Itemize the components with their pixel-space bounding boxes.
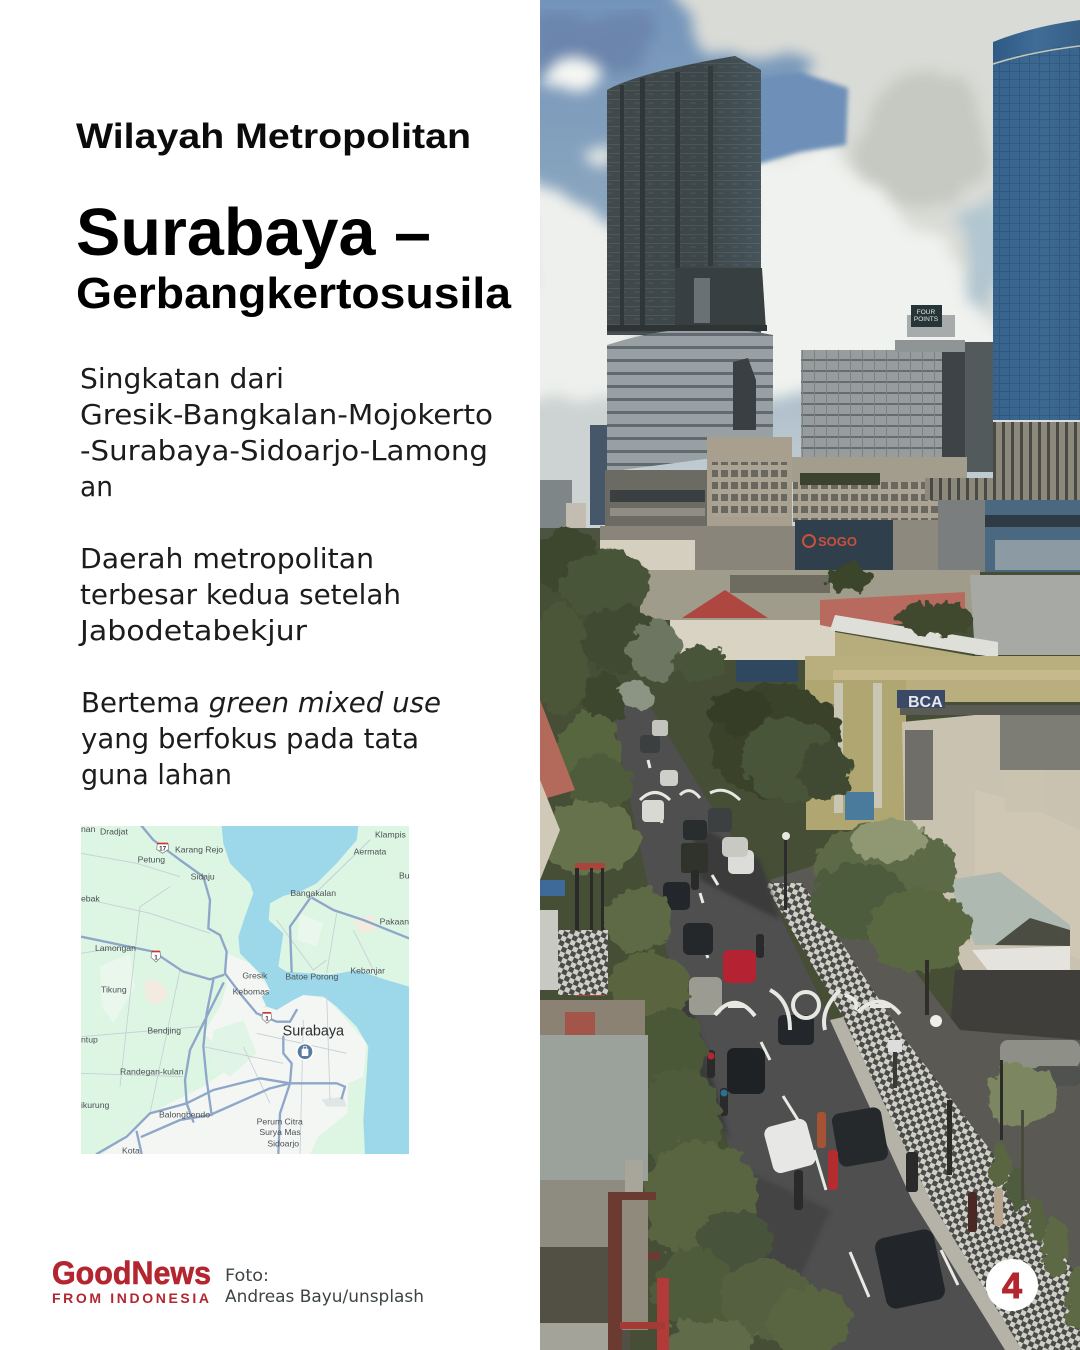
photo: BCA building: [897, 690, 1080, 1045]
text block: green mixed use: Bertema green mixed use: [81, 686, 441, 719]
map: place labels: Bendjing: [147, 1026, 181, 1036]
photo: shopping mall podium: [600, 437, 1080, 572]
photo: tower drum podium: [607, 325, 773, 472]
map: urban land: [100, 913, 377, 1154]
photo: shopping mall podium: SOGO: [818, 534, 857, 549]
map: place labels: ikurung: [81, 1100, 110, 1110]
heading: region label: Wilayah Metropolitan: [76, 117, 471, 156]
map: place labels: Surya Mas: [259, 1127, 301, 1137]
photo: left building: [540, 1000, 648, 1350]
photo: BCA building: BCA: [908, 694, 943, 711]
photo: pavement curb: [830, 1017, 1022, 1350]
photo: hotel block: POINTS: [914, 316, 939, 323]
map: place labels: [81, 824, 410, 1155]
map: place labels: Randegan-kulan: [120, 1067, 184, 1077]
map: place labels: Bangakalan: [290, 888, 336, 898]
map: highway shields: 1: [265, 1016, 269, 1023]
photo: left sidewalk and shops: [540, 700, 608, 995]
map: highway shields: 1: [154, 954, 158, 961]
logo: GoodNews from Indonesia: GoodNews: [52, 1255, 211, 1291]
text block: second largest metropolitan: [78, 542, 401, 647]
map: place labels: Gresik: [242, 971, 268, 981]
photo: road: [609, 690, 1022, 1350]
text block: green mixed use: yang berfokus pada tata: [81, 722, 419, 755]
map of Surabaya region: [81, 824, 410, 1155]
map: place labels: ntup: [81, 1035, 98, 1045]
map: place labels: Aermata: [354, 847, 387, 857]
map: place labels: Kebomas: [233, 986, 270, 996]
text block: second largest metropolitan: Daerah metropolitan: [80, 542, 374, 575]
photo: olive building: [805, 615, 1080, 830]
title: Gerbangkertosusila: Gerbangkertosusila: [76, 269, 512, 318]
photo: red steel frames: [575, 863, 669, 1350]
map: place labels: Tikung: [101, 985, 127, 995]
map: highway shields: 17: [159, 846, 167, 853]
map: place labels: Lamongan: [95, 943, 136, 953]
map: main roads: [81, 826, 409, 1154]
photo: street ornaments: [640, 790, 900, 1030]
map: place labels: nan: [81, 824, 96, 834]
map: place labels: Sidoarjo: [267, 1139, 299, 1149]
text block: abbreviation: Singkatan dari: [80, 362, 284, 395]
photo: ground base beneath trees: [540, 540, 1080, 1350]
map: place labels: Batoe Porong: [285, 972, 338, 982]
photo: rooftops: [600, 540, 1080, 682]
map: place labels: Klampis: [375, 830, 406, 840]
map: place labels: ebak: [81, 894, 100, 904]
text block: abbreviation: [80, 362, 493, 503]
page number badge: [986, 1259, 1038, 1311]
text block: green mixed use: guna lahan: [81, 758, 232, 791]
photo: dark glass tower: [607, 56, 766, 335]
photo: road shadows: [682, 829, 827, 1274]
map: place labels: Dradjat: [100, 827, 128, 837]
photo: sky and clouds: [520, 0, 1080, 560]
photo: cars: [640, 720, 1080, 1310]
map: place labels: Pakaan: [380, 916, 409, 926]
map: place labels: Sidaju: [191, 872, 215, 882]
photo credit: [225, 1266, 424, 1307]
map: place labels: Balongbendo: [159, 1110, 210, 1120]
logo: GoodNews from Indonesia: [52, 1255, 211, 1306]
map: place labels: Karang Rejo: [175, 845, 223, 855]
photo credit: Andreas Bayu/unsplash: [225, 1287, 424, 1307]
page number badge: 4: [1002, 1265, 1022, 1306]
map: place labels: Surabaya: [283, 1023, 344, 1039]
photo: trees left of road: [530, 528, 852, 1350]
text block: green mixed use: [81, 686, 441, 791]
map: place labels: Kota: [122, 1145, 140, 1155]
map: place labels: Kebanjar: [350, 966, 385, 976]
map: highway shields: [151, 843, 272, 1023]
photo credit: Foto:: [225, 1266, 269, 1286]
photo: Surabaya street and skyline: [520, 0, 1080, 1350]
photo: plaza and pavement: [770, 866, 1080, 1270]
photo: blue glass tower: [993, 20, 1080, 491]
map: place labels: Bu: [399, 871, 410, 881]
photo: street trees right: [708, 564, 1080, 1330]
map: water: [222, 826, 409, 1154]
photo: street lamps and people: [782, 832, 1024, 1232]
photo: distant left buildings: [540, 425, 610, 548]
photo: motorcycles: [691, 870, 918, 1210]
title: Surabaya: Surabaya –: [76, 195, 431, 270]
map: place labels: Petung: [138, 855, 165, 865]
text block: second largest metropolitan: Jabodetabekjur: [78, 614, 308, 647]
photo: checkered sidewalk: [764, 883, 1080, 1350]
text block: abbreviation: -Surabaya-Sidoarjo-Lamong: [80, 434, 488, 467]
logo: GoodNews from Indonesia: FROM INDONESIA: [52, 1290, 209, 1306]
photo: hotel block: FOUR: [917, 309, 936, 316]
map: minor roads: [81, 853, 377, 1154]
photo: hotel block: [801, 305, 993, 475]
text block: second largest metropolitan: terbesar kedua setelah: [80, 578, 401, 611]
map: place labels: Perum Citra: [257, 1117, 303, 1127]
photo: lane markings: [648, 760, 958, 1297]
map: city pin: [296, 1043, 314, 1061]
text block: abbreviation: Gresik-Bangkalan-Mojokerto: [80, 398, 493, 431]
text block: abbreviation: an: [80, 470, 113, 503]
